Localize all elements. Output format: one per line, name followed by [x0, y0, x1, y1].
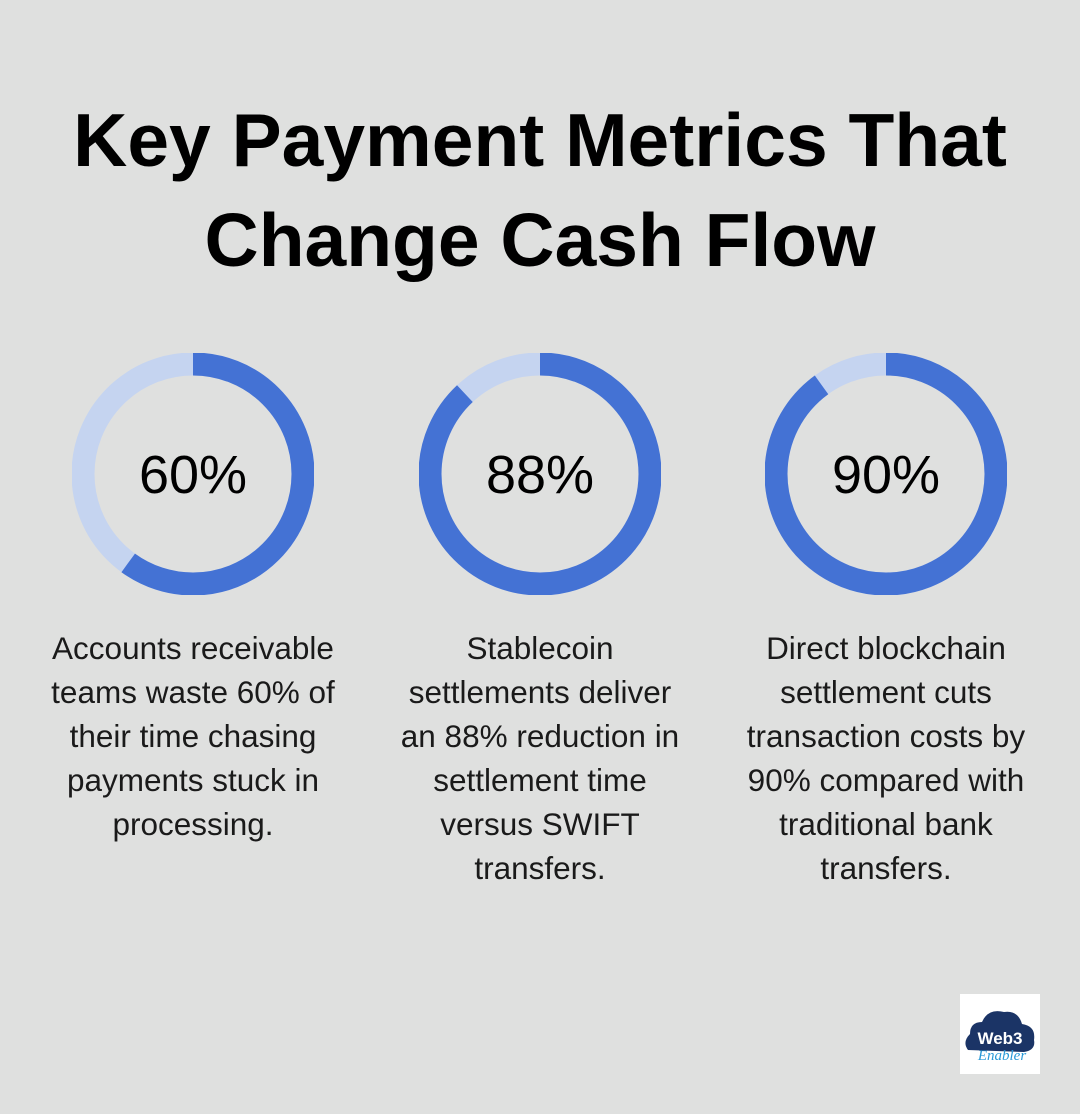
- donut: 60%: 60%: [139, 445, 247, 505]
- donut: 88%: [419, 353, 661, 595]
- logo: Enabler: [977, 1048, 1026, 1064]
- logo: Web3: [977, 1029, 1023, 1048]
- logo: [960, 994, 1040, 1074]
- donut: 90%: [765, 353, 1007, 595]
- donut: 60%: [72, 353, 314, 595]
- text: 90%: Direct blockchain settlement cuts transaction costs by 90% compared with traditional bank transfers.: [747, 630, 1025, 886]
- donut: 90%: 90%: [832, 445, 940, 505]
- text: 88%: Stablecoin settlements deliver an 88% reduction in settlement time versus SWIFT transfers.: [401, 630, 679, 886]
- text: 60%: Accounts receivable teams waste 60% of their time chasing payments stuck in processing.: [51, 630, 335, 842]
- title: Change Cash Flow: [205, 198, 875, 282]
- donut: 88%: 88%: [486, 445, 594, 505]
- title: Key Payment Metrics That: [73, 98, 1007, 182]
- title: [73, 98, 1007, 282]
